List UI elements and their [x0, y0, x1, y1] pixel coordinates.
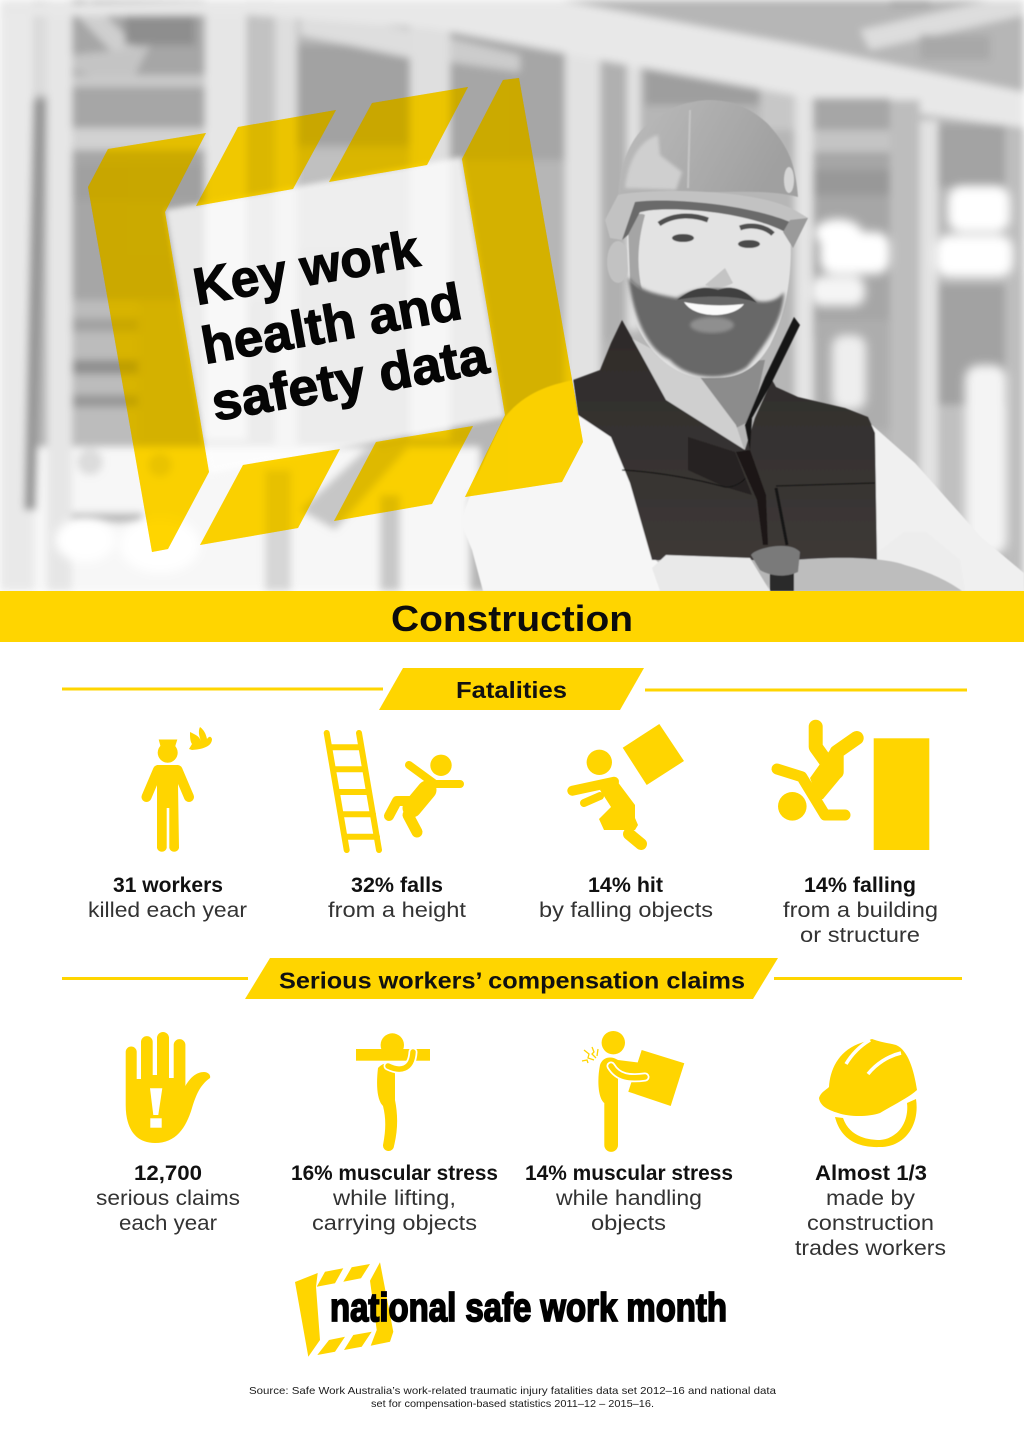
stat: 12,700: each year [119, 1211, 217, 1235]
stat: 14% hit [539, 874, 713, 922]
stat: 14% muscular stress: 14% muscular stress [525, 1162, 733, 1185]
icon: worker falling from a structure [777, 727, 929, 850]
brim underside shadow [622, 201, 790, 240]
blurred timber framing background [0, 0, 1024, 591]
moustache [677, 288, 757, 303]
face shade left [628, 214, 645, 290]
stat: 16% muscular stress: while lifting, [332, 1186, 456, 1210]
right ear flap [783, 218, 808, 248]
bright gaps between framing [55, 186, 1013, 573]
left bracket [88, 133, 209, 552]
right shirt sleeve [870, 425, 1024, 591]
construction banner [0, 591, 1024, 642]
source note [249, 1385, 776, 1410]
icon: raised hand with exclamation [126, 1032, 210, 1143]
fatalities heading [62, 668, 967, 710]
icon: hard hat [819, 1039, 917, 1147]
source note: Source: Safe Work Australia’s work-related traumatic injury fatalities data set 2012–16 and national data [249, 1385, 776, 1397]
shirt collar [631, 338, 745, 452]
ladder [327, 733, 379, 850]
worker figure [461, 100, 1024, 591]
top dash one [196, 110, 336, 206]
stat: almost 1/3 [795, 1162, 946, 1260]
hero photo: construction worker in timber frame [0, 0, 1024, 591]
helmet dome [618, 100, 798, 197]
stat: 32% falls: 32% falls [351, 874, 443, 897]
stat: 14% falling: or structure [800, 923, 920, 947]
title [189, 220, 494, 433]
fatalities heading: Fatalities [456, 677, 567, 703]
title: safety data [207, 327, 494, 433]
watch band [770, 570, 794, 591]
icon: worker carrying a beam [356, 1033, 430, 1151]
stat: 32% falls [328, 874, 466, 922]
helmet brim [606, 191, 808, 240]
stat: almost 1/3: made by [826, 1186, 915, 1210]
stat: 31 workers: 31 workers [113, 874, 223, 897]
helmet ridge [688, 110, 690, 188]
sign translucent panel [165, 157, 505, 474]
stat: 12,700: serious claims [96, 1186, 240, 1210]
stat: 14% falling [783, 874, 938, 947]
hand on right arm [877, 532, 965, 591]
stat: 16% muscular stress: carrying objects [312, 1211, 477, 1235]
smile [684, 302, 744, 315]
stat: 12,700 [96, 1162, 240, 1235]
national safe work month logo [295, 1262, 727, 1357]
stat: almost 1/3: construction [807, 1211, 934, 1235]
vest body [573, 320, 877, 560]
nose shade [705, 268, 733, 287]
construction banner: Construction [391, 598, 633, 639]
watch face [751, 546, 800, 576]
falling figure [389, 755, 460, 832]
helmet scuffs [625, 135, 682, 190]
top dash two [329, 87, 468, 182]
icon: ladder and falling worker [327, 733, 460, 850]
stat: 16% muscular stress [291, 1162, 498, 1235]
eyebrows [659, 216, 708, 224]
stat: 14% falling: 14% falling [804, 874, 916, 897]
stat: 12,700: 12,700 [134, 1162, 202, 1185]
stat: 14% hit: 14% hit [588, 874, 663, 897]
icon: worker hit by falling object [572, 724, 684, 844]
chin patch [690, 317, 734, 333]
stat: 14% hit: by falling objects [539, 898, 713, 922]
vest zip [736, 450, 768, 545]
sign tint [88, 78, 583, 552]
vest pocket shade [688, 437, 752, 495]
stat: 16% muscular stress: 16% muscular stress [291, 1162, 498, 1185]
title: Key work [189, 220, 424, 317]
vest seam lines [622, 470, 875, 487]
national safe work month logo: national safe work month [330, 1286, 727, 1330]
face [627, 205, 791, 378]
serious claims heading [62, 958, 962, 999]
stat: 14% muscular stress [525, 1162, 733, 1235]
sign yellow multiply layer [88, 78, 583, 552]
icon: worker handling a box [582, 1031, 684, 1152]
stat: 31 workers: killed each year [88, 898, 247, 922]
source note: set for compensation-based statistics 2011–12 – 2015–16. [371, 1398, 654, 1410]
serious claims heading: Serious workers’ compensation claims [279, 968, 745, 994]
stat: 14% falling: from a building [783, 898, 938, 922]
bottom dash two [334, 426, 473, 521]
helmet highlight [784, 167, 794, 193]
stat: 31 workers [88, 874, 247, 922]
title: health and [197, 273, 466, 376]
forearm left [652, 555, 770, 591]
right bracket [462, 78, 583, 497]
bottom dash one [200, 449, 340, 545]
vest lower pocket zip [776, 488, 787, 545]
raised right collar [745, 317, 800, 450]
stat: 14% muscular stress: while handling [555, 1186, 702, 1210]
stat: almost 1/3: trades workers [795, 1236, 946, 1260]
left shirt sleeve [466, 380, 660, 591]
eyes [672, 234, 694, 242]
beard [628, 277, 784, 377]
neck [701, 360, 766, 428]
ear [607, 241, 629, 283]
forearm right [792, 558, 962, 591]
stat: 32% falls: from a height [328, 898, 466, 922]
stat: almost 1/3: Almost 1/3 [815, 1162, 927, 1185]
icon: standing worker with dove [146, 727, 212, 852]
stat: 14% muscular stress: objects [591, 1211, 666, 1235]
